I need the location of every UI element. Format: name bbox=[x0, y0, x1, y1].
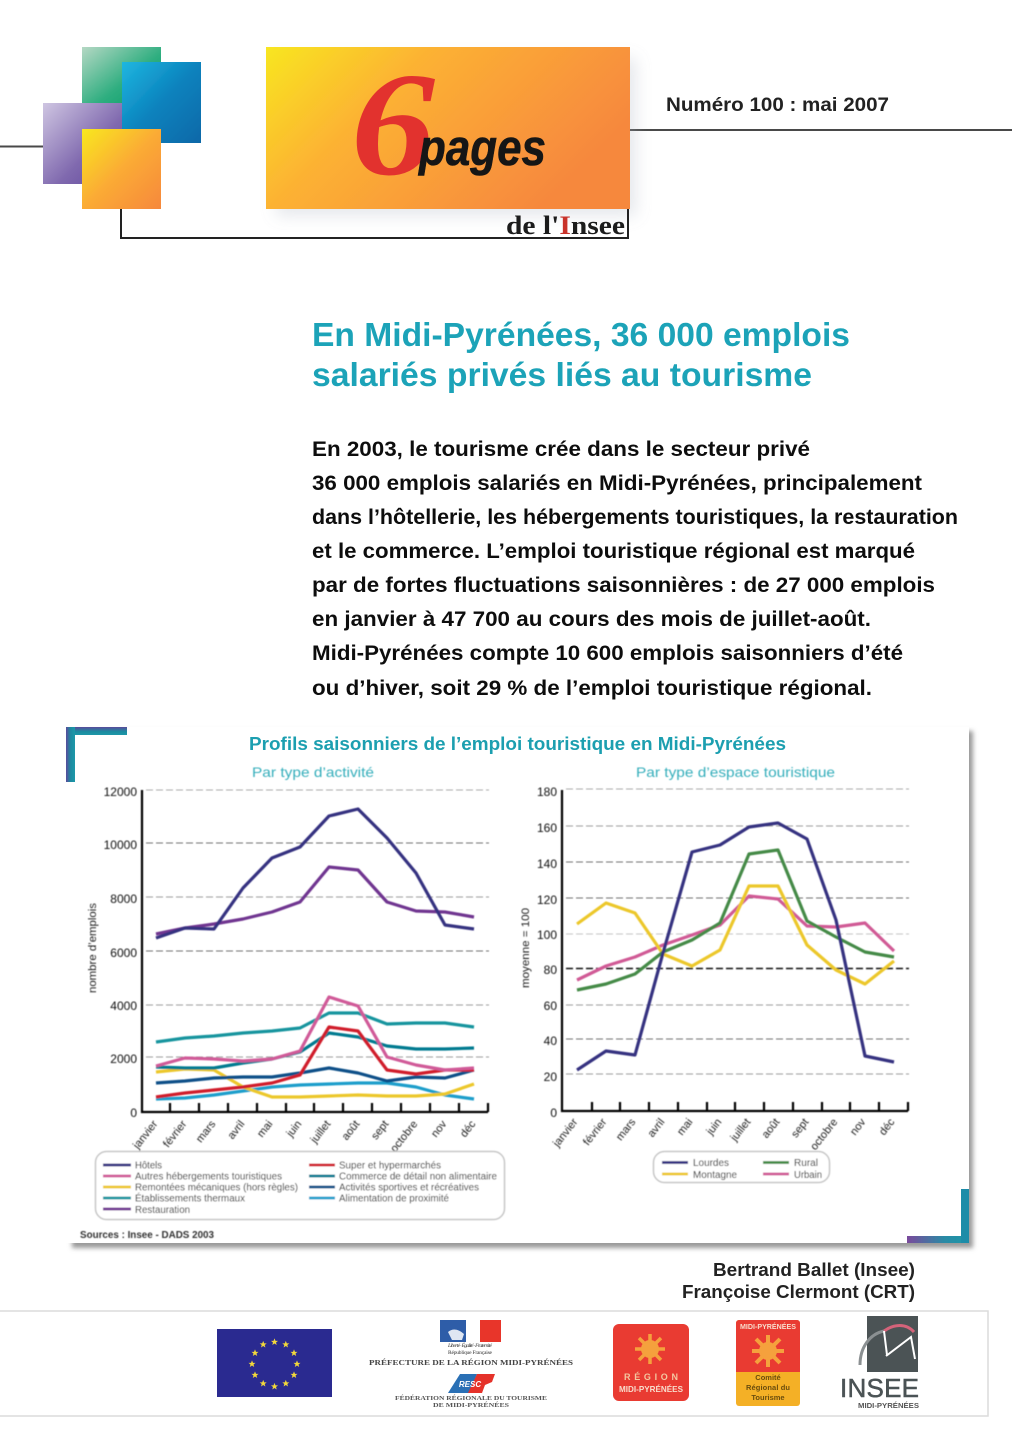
y axis labels bbox=[104, 785, 137, 1120]
logo: fédération régionale du tourisme: DE MIDI-PYRÉNÉES bbox=[433, 1401, 509, 1409]
intro text block: 36 000 emplois salariés en Midi-Pyrénées, principalement bbox=[312, 472, 922, 495]
header rule: left bbox=[0, 146, 43, 148]
y axis labels: 80 bbox=[544, 963, 557, 977]
month labels: mai bbox=[255, 1118, 275, 1140]
line: Établissements thermaux bbox=[156, 1013, 474, 1042]
line: Commerce de détail non alimentaire bbox=[156, 1033, 474, 1068]
logo: INSEE Midi-Pyrénées: INSEE bbox=[840, 1373, 919, 1403]
chart: par type d'espace touristique bbox=[520, 764, 909, 1182]
logo word pages: pages bbox=[417, 119, 546, 176]
month labels: avril bbox=[225, 1118, 247, 1142]
logo: République française préfecture: Liberté · Égalité · Fraternité bbox=[447, 1341, 493, 1349]
logo: fédération régionale du tourisme bbox=[395, 1374, 547, 1409]
line: Remontées mécaniques bbox=[156, 1069, 474, 1097]
logo: Région Midi-Pyrénées: MIDI-PYRÉNÉES bbox=[619, 1384, 683, 1394]
chart: par type d'activité bbox=[80, 764, 504, 1241]
logo: Comité Régional du Tourisme: MIDI-PYRÉNÉES bbox=[740, 1322, 796, 1331]
y axis labels: 120 bbox=[537, 893, 557, 907]
intro text block bbox=[312, 438, 958, 700]
y axis title: moyenne = 100 bbox=[520, 908, 532, 988]
chart subtitle: Par type d’espace touristique bbox=[636, 764, 835, 780]
line: Restauration bbox=[156, 867, 474, 934]
legend: activity: Super et hypermarchés bbox=[339, 1160, 441, 1172]
issue number: Numéro 100 : mai 2007 bbox=[666, 95, 889, 116]
month labels: déc bbox=[458, 1118, 479, 1140]
corner bracket: bottom right bbox=[907, 1189, 969, 1243]
y axis labels: 100 bbox=[537, 928, 557, 942]
month labels: juillet bbox=[308, 1118, 333, 1146]
y axis labels: 60 bbox=[544, 999, 557, 1013]
logo: République française préfecture bbox=[369, 1320, 573, 1367]
intro text block: Midi-Pyrénées compte 10 600 emplois saisonniers d’été bbox=[312, 642, 903, 665]
y axis labels: 0 bbox=[130, 1106, 137, 1120]
intro text block: dans l’hôtellerie, les hébergements touristiques, la restauration bbox=[312, 506, 958, 529]
y axis labels: 160 bbox=[537, 821, 557, 835]
orange panel shadow bbox=[276, 58, 636, 216]
line: Hôtels bbox=[156, 809, 474, 938]
y axis labels: 140 bbox=[537, 857, 557, 871]
line: Rural bbox=[577, 850, 894, 990]
month labels: août bbox=[340, 1118, 362, 1143]
y axis labels bbox=[537, 785, 557, 1120]
logo subtitle: de l'Insee bbox=[506, 211, 625, 240]
y axis labels: 12000 bbox=[104, 785, 137, 799]
legend: activity: Activités sportives et récréatives bbox=[339, 1182, 479, 1194]
month labels: juin bbox=[284, 1118, 304, 1140]
legend: tourist area bbox=[654, 1152, 830, 1182]
month labels: janvier bbox=[550, 1116, 581, 1150]
legend: tourist area: Urbain bbox=[794, 1170, 822, 1181]
orange logo panel bbox=[266, 47, 630, 209]
logo: INSEE Midi-Pyrénées: MIDI-PYRÉNÉES bbox=[858, 1401, 919, 1410]
intro text block: ou d’hiver, soit 29 % de l’emploi touristique régional. bbox=[312, 677, 872, 700]
y axis labels: 20 bbox=[544, 1070, 557, 1084]
logo numeral 6: 6 bbox=[351, 43, 435, 207]
logo: Région Midi-Pyrénées: RÉGION bbox=[624, 1372, 678, 1382]
partner logo strip bbox=[0, 1311, 988, 1416]
axes bbox=[562, 790, 908, 1111]
month labels: juillet bbox=[728, 1116, 753, 1144]
logo: fédération régionale du tourisme: RESC bbox=[459, 1380, 481, 1389]
grid lines bbox=[566, 789, 909, 1074]
y axis labels: 0 bbox=[550, 1106, 557, 1120]
grid lines bbox=[146, 790, 489, 1057]
y axis labels: 10000 bbox=[104, 838, 137, 852]
month labels: nov bbox=[848, 1116, 869, 1138]
authors: Françoise Clermont (CRT) bbox=[682, 1282, 915, 1302]
y axis labels: 4000 bbox=[110, 999, 137, 1013]
month labels: déc bbox=[877, 1116, 898, 1138]
strip frame bbox=[0, 1311, 988, 1416]
y axis labels: 6000 bbox=[110, 946, 137, 960]
authors bbox=[682, 1260, 915, 1302]
legend: activity: Hôtels bbox=[135, 1160, 162, 1172]
intro text block: par de fortes fluctuations saisonnières : de 27 000 emplois bbox=[312, 574, 935, 597]
intro text block: En 2003, le tourisme crée dans le secteur privé bbox=[312, 438, 810, 461]
logo frame line bbox=[121, 209, 628, 238]
legend: activity bbox=[96, 1152, 504, 1220]
logo: European Union flag bbox=[217, 1329, 332, 1397]
month labels: janvier bbox=[130, 1118, 161, 1152]
panel: seasonal profiles bbox=[66, 727, 973, 1248]
corner bracket: top left bbox=[66, 727, 127, 782]
logo: République française préfecture: République Française bbox=[448, 1350, 493, 1356]
icon: overlapping coloured squares bbox=[43, 47, 201, 209]
legend: activity: Restauration bbox=[135, 1205, 190, 1216]
logo: Comité Régional du Tourisme bbox=[736, 1320, 800, 1406]
line: Alimentation de proximité bbox=[156, 1083, 474, 1099]
line: Lourdes bbox=[577, 823, 894, 1070]
legend: tourist area: Montagne bbox=[693, 1170, 737, 1181]
logo: Comité Régional du Tourisme: Comité bbox=[755, 1373, 781, 1382]
line: Montagne bbox=[577, 886, 894, 984]
intro text block: et le commerce. L’emploi touristique régional est marqué bbox=[312, 540, 915, 563]
header rule: right bbox=[630, 129, 1012, 131]
month labels: mars bbox=[194, 1118, 219, 1145]
masthead: 6 pages de l'Insee bbox=[0, 43, 1012, 240]
month labels: juin bbox=[704, 1116, 724, 1138]
month labels: février bbox=[581, 1116, 610, 1148]
month labels: sept bbox=[789, 1116, 811, 1140]
y axis labels: 40 bbox=[544, 1034, 557, 1048]
panel shadow bbox=[72, 731, 973, 1248]
month labels: sept bbox=[369, 1118, 391, 1142]
panel title: Profils saisonniers de l’emploi touristique en Midi-Pyrénées bbox=[249, 734, 786, 754]
month labels: août bbox=[760, 1116, 782, 1141]
main title: salariés privés liés au tourisme bbox=[312, 356, 812, 393]
month labels: nov bbox=[429, 1118, 450, 1140]
month labels: mai bbox=[675, 1116, 695, 1138]
line: Super et hypermarchés bbox=[156, 1027, 474, 1097]
month labels: avril bbox=[645, 1116, 667, 1140]
chart subtitle: Par type d’activité bbox=[252, 764, 374, 780]
logo: Comité Régional du Tourisme: Régional du bbox=[746, 1383, 790, 1392]
month labels: octobre bbox=[808, 1116, 840, 1153]
logo: fédération régionale du tourisme: FÉDÉRATION RÉGIONALE DU TOURISME bbox=[395, 1394, 547, 1402]
month labels bbox=[550, 1116, 898, 1153]
month labels bbox=[130, 1118, 479, 1155]
month labels: octobre bbox=[388, 1118, 420, 1155]
y axis labels: 180 bbox=[537, 785, 557, 799]
legend: tourist area: Lourdes bbox=[693, 1158, 729, 1169]
panel background bbox=[66, 727, 969, 1243]
logo: INSEE Midi-Pyrénées bbox=[840, 1316, 919, 1410]
month labels: février bbox=[161, 1118, 190, 1150]
intro text block: en janvier à 47 700 au cours des mois de juillet-août. bbox=[312, 608, 871, 631]
month labels: mars bbox=[614, 1116, 639, 1143]
axes bbox=[142, 790, 488, 1112]
y axis title: nombre d’emplois bbox=[87, 902, 99, 993]
logo: Comité Régional du Tourisme: Tourisme bbox=[751, 1393, 785, 1402]
source note: Sources : Insee - DADS 2003 bbox=[80, 1230, 214, 1241]
main title: En Midi-Pyrénées, 36 000 emplois bbox=[312, 316, 850, 353]
main title bbox=[312, 316, 850, 393]
legend: activity: Commerce de détail non alimentaire bbox=[339, 1172, 497, 1182]
legend: activity: Alimentation de proximité bbox=[339, 1194, 449, 1204]
logo: République française préfecture: PRÉFECTURE DE LA RÉGION MIDI-PYRÉNÉES bbox=[369, 1357, 573, 1367]
legend: activity: Autres hébergements touristiques bbox=[135, 1172, 282, 1182]
line: Urbain bbox=[577, 896, 894, 980]
legend: activity: Établissements thermaux bbox=[135, 1192, 245, 1204]
legend: activity: Remontées mécaniques (hors règles) bbox=[135, 1182, 298, 1194]
authors: Bertrand Ballet (Insee) bbox=[713, 1260, 915, 1280]
line: Activités sportives et récréatives bbox=[156, 1068, 474, 1083]
line: Autres hébergements touristiques bbox=[156, 997, 474, 1070]
logo: Région Midi-Pyrénées bbox=[613, 1324, 689, 1401]
y axis labels: 8000 bbox=[110, 892, 137, 906]
legend: tourist area: Rural bbox=[794, 1158, 818, 1169]
y axis labels: 2000 bbox=[110, 1052, 137, 1066]
